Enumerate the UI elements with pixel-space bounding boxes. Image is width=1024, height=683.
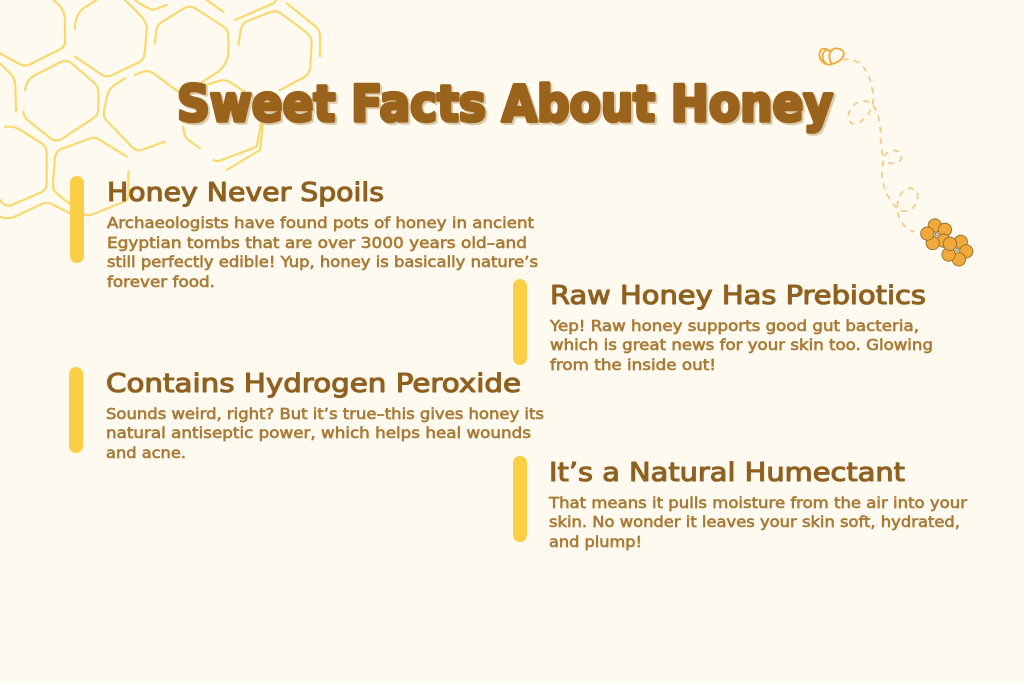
body text: [548, 494, 968, 551]
fact: It's a Natural Humectant: [513, 456, 968, 551]
body text: Archaeologists have found pots of honey in ancient: [107, 214, 534, 232]
body text: Egyptian tombs that are over 3000 years old–and: [107, 234, 527, 252]
fact: Contains Hydrogen Peroxide: [69, 367, 544, 462]
body text: [107, 214, 538, 291]
body text: Sounds weird, right? But it’s true–this gives honey its: [106, 405, 544, 423]
icon: flowers: [918, 216, 978, 270]
accent bar: [70, 176, 84, 263]
title: Sweet Facts About Honey: [177, 75, 833, 133]
icon: butterfly: [819, 48, 844, 65]
accent bar: [513, 279, 527, 365]
fact: Honey Never Spoils: [70, 176, 538, 291]
accent bar: [69, 367, 83, 453]
body text: [106, 405, 544, 462]
heading: It’s a Natural Humectant: [549, 458, 905, 488]
heading: Raw Honey Has Prebiotics: [550, 281, 926, 311]
body text: That means it pulls moisture from the air into your: [548, 494, 968, 512]
body text: Yep! Raw honey supports good gut bacteria,: [549, 317, 919, 335]
body text: and plump!: [549, 533, 642, 551]
accent bar: [513, 456, 527, 542]
body text: skin. No wonder it leaves your skin soft, hydrated,: [549, 513, 960, 531]
body text: natural antiseptic power, which helps heal wounds: [106, 424, 531, 442]
honeycomb decoration: [0, 0, 320, 218]
heading: Contains Hydrogen Peroxide: [106, 369, 521, 399]
body text: which is great news for your skin too. Glowing: [550, 336, 933, 354]
body text: from the inside out!: [550, 356, 716, 374]
body text: [549, 317, 933, 374]
body text: still perfectly edible! Yup, honey is basically nature’s: [107, 253, 538, 271]
heading: Honey Never Spoils: [107, 178, 384, 208]
body text: forever food.: [107, 273, 215, 291]
fact: Raw Honey Has Prebiotics: [513, 279, 933, 374]
title: Sweet Facts About Honey: [179, 77, 835, 135]
dashed bee flight path: [843, 59, 918, 232]
body text: and acne.: [106, 444, 186, 462]
